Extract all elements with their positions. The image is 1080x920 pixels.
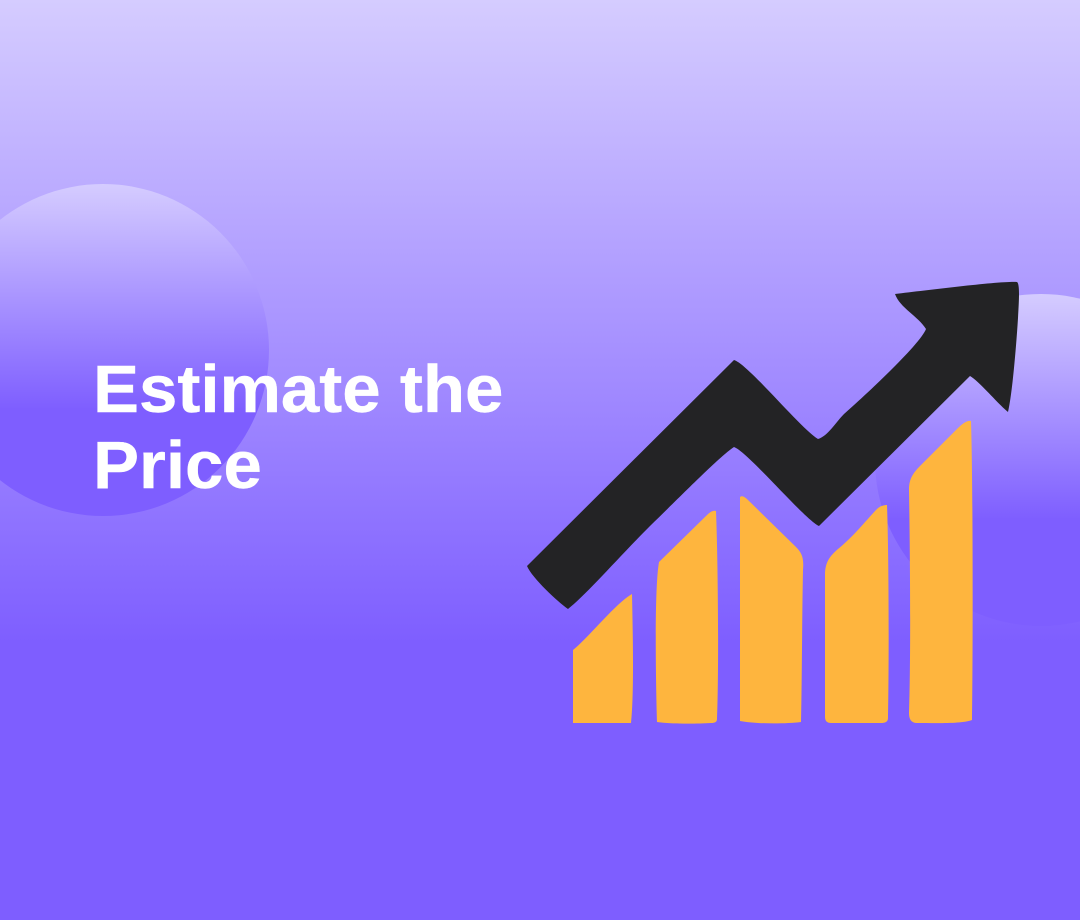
icon: bar 3 bbox=[740, 496, 803, 723]
icon: bar 2 bbox=[656, 511, 718, 724]
decorative circle: left bbox=[0, 184, 269, 516]
icon: bar 1 bbox=[573, 594, 633, 723]
decorative circle: right bbox=[875, 294, 1080, 626]
title: Estimate the Price bbox=[93, 352, 503, 503]
icon: bar 4 bbox=[825, 505, 889, 723]
icon: rising arrow bbox=[527, 282, 1019, 609]
icon: bar 5 bbox=[909, 421, 973, 723]
